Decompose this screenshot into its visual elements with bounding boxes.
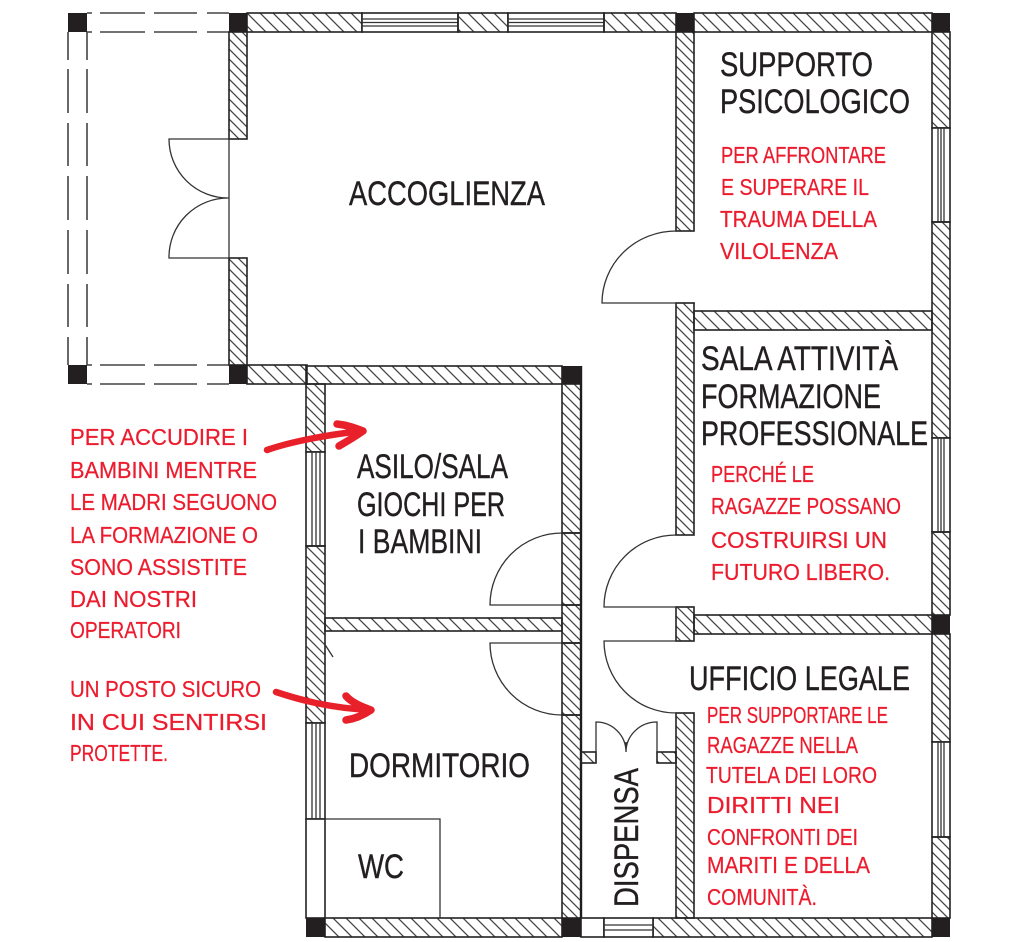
central wall right rooms — [653, 32, 932, 937]
arrow: to asilo — [267, 424, 363, 450]
right room doors — [602, 231, 695, 713]
note: dormitorio: PROTETTE. — [70, 740, 168, 766]
note: asilo: LE MADRI SEGUONO — [70, 489, 277, 515]
room label: ufficio legale: UFFICIO LEGALE — [689, 660, 910, 698]
note: supporto psicologico: PER AFFRONTARE — [721, 142, 886, 168]
note: sala attivita: PERCHÉ LE — [711, 461, 814, 487]
note: sala attivita: COSTRUIRSI UN — [711, 527, 887, 553]
central block walls — [306, 366, 581, 937]
top wall — [247, 13, 932, 32]
note: sala attivita: FUTURO LIBERO. — [711, 559, 890, 585]
note: asilo: OPERATORI — [70, 617, 181, 643]
room label: supporto psicologico: SUPPORTO — [720, 46, 873, 84]
room label: dormitorio: DORMITORIO — [349, 747, 530, 785]
room label: sala attivita: FORMAZIONE — [701, 378, 881, 416]
room label: sala attivita: SALA ATTIVITÀ — [701, 340, 898, 378]
note: sala attivita: RAGAZZE POSSANO — [711, 493, 901, 519]
note: asilo: PER ACCUDIRE I — [70, 424, 248, 450]
note: asilo: SONO ASSISTITE — [70, 554, 247, 580]
block room doors — [490, 533, 562, 715]
note: asilo: DAI NOSTRI — [70, 586, 197, 612]
note: ufficio legale: PER SUPPORTARE LE — [707, 702, 888, 728]
room label: asilo: GIOCHI PER — [357, 486, 505, 524]
west wall of reception — [229, 32, 307, 384]
note: ufficio legale — [706, 702, 888, 910]
note: asilo: LA FORMAZIONE O — [70, 522, 258, 548]
note: ufficio legale: DIRITTI NEI — [707, 792, 840, 818]
note: dormitorio — [70, 676, 267, 766]
note: supporto psicologico: VILOLENZA — [720, 238, 839, 264]
room label: asilo: ASILO/SALA — [357, 448, 508, 486]
room label: asilo: I BAMBINI — [358, 523, 482, 561]
pantry door and walls — [581, 722, 676, 937]
room label: asilo — [357, 448, 508, 561]
note: supporto psicologico: E SUPERARE IL — [721, 174, 869, 200]
note: ufficio legale: TUTELA DEI LORO — [706, 762, 877, 788]
room label: accoglienza: ACCOGLIENZA — [349, 175, 545, 213]
note: supporto psicologico — [720, 142, 886, 264]
note: ufficio legale: MARITI E DELLA — [707, 852, 871, 878]
note: asilo — [70, 424, 277, 643]
room label: sala attivita — [701, 340, 928, 453]
room label: wc: WC — [358, 848, 404, 886]
room label: supporto psicologico: PSICOLOGICO — [720, 83, 910, 121]
portico: dashed outline — [68, 13, 229, 384]
note: asilo: BAMBINI MENTRE — [70, 457, 257, 483]
room label: supporto psicologico — [720, 46, 910, 121]
note: ufficio legale: RAGAZZE NELLA — [707, 732, 859, 758]
note: supporto psicologico: TRAUMA DELLA — [720, 206, 878, 232]
east wall — [932, 32, 950, 918]
note: sala attivita — [711, 461, 901, 585]
note: ufficio legale: CONFRONTI DEI — [707, 824, 858, 850]
note: ufficio legale: COMUNITÀ. — [707, 884, 817, 910]
arrow: to dormitorio — [276, 692, 371, 720]
note: dormitorio: UN POSTO SICURO — [70, 676, 261, 702]
room label: sala attivita: PROFESSIONALE — [701, 415, 928, 453]
note: dormitorio: IN CUI SENTIRSI — [70, 709, 267, 735]
room label: dispensa: DISPENSA — [608, 768, 646, 907]
entrance double door — [169, 139, 229, 258]
WC box — [306, 819, 440, 918]
